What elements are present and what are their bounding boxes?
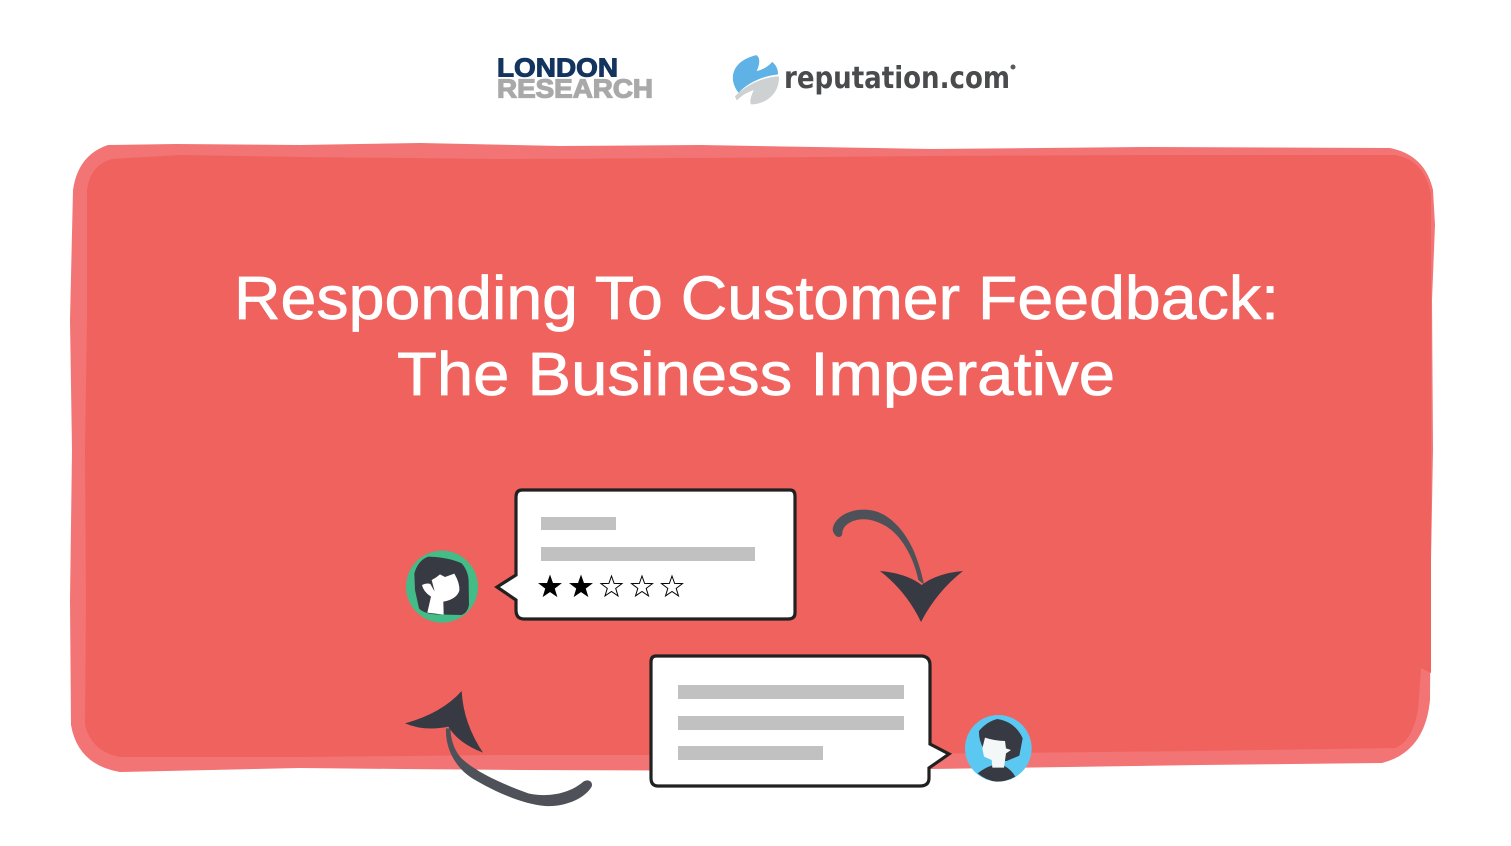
title: The Business Imperative [397, 340, 1115, 408]
logo: London Research [497, 52, 653, 104]
response text placeholder bars [678, 685, 904, 760]
review text placeholder bars [541, 517, 755, 561]
speech bubble: business response [651, 656, 949, 786]
icon: business avatar [965, 715, 1032, 782]
arrow: review to response [833, 510, 963, 622]
logo: London Research: RESEARCH [497, 74, 653, 104]
speech bubble: customer review [497, 490, 795, 619]
wordmark: reputation.com [784, 61, 1010, 96]
logo: reputation.com [733, 55, 1016, 104]
icon: customer avatar [406, 551, 478, 623]
panel: red brush background [70, 143, 1435, 772]
arrow: response back to customer [405, 691, 592, 806]
icon: reputation.com mark [733, 55, 779, 104]
logo: London Research: LONDON [497, 52, 618, 82]
title: Responding To Customer Feedback: [234, 264, 1279, 332]
star rating: 2 of 5 [540, 576, 682, 596]
title [234, 264, 1279, 408]
